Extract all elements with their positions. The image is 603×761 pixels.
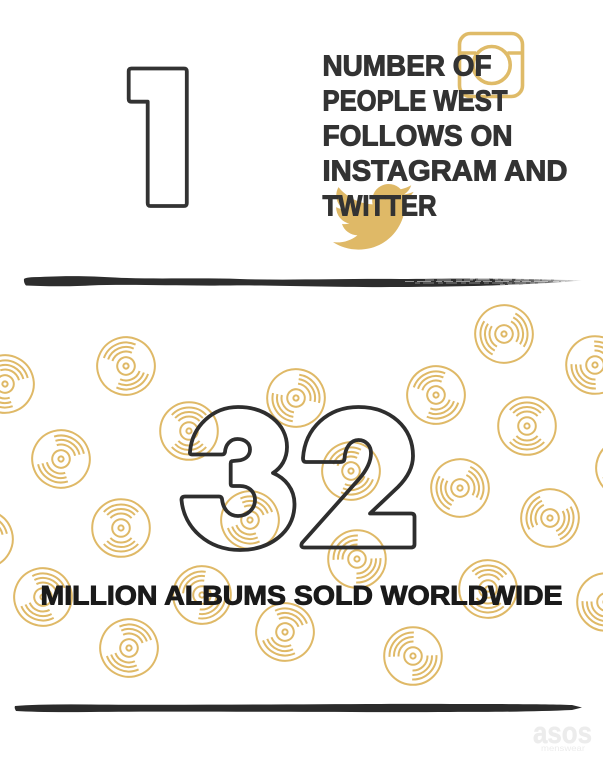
stat text: million albums sold: MILLION ALBUMS SOLD WORLDWIDE <box>40 580 562 610</box>
icon: vinyl record <box>469 299 539 369</box>
icon: twitter bird <box>333 184 414 250</box>
icon: vinyl record <box>91 610 167 686</box>
icon: vinyl record <box>162 555 242 635</box>
icon: vinyl record <box>6 560 80 634</box>
icon: vinyl record <box>565 561 603 643</box>
icon: vinyl record <box>88 328 164 404</box>
icon: vinyl record <box>212 482 288 558</box>
icon: vinyl record <box>514 482 586 554</box>
icon: vinyl record <box>554 324 603 406</box>
icon: vinyl record <box>498 397 556 455</box>
icon: vinyl record <box>0 500 23 578</box>
icon: vinyl record <box>398 357 474 433</box>
digit 3 <box>182 407 294 550</box>
icon: vinyl record <box>372 615 454 697</box>
stat text: number of people West follows: TWITTER <box>322 190 436 222</box>
icon: vinyl record <box>457 558 519 620</box>
digit 2 <box>301 407 414 548</box>
stat text: number of people West follows: INSTAGRAM AND <box>322 156 568 188</box>
icon: vinyl record <box>0 345 44 423</box>
stat text: number of people West follows: FOLLOWS ON <box>322 120 512 152</box>
stat text: number of people West follows: PEOPLE WEST <box>322 86 508 118</box>
icon: vinyl record <box>316 518 398 600</box>
icon: vinyl record <box>424 452 496 524</box>
icon: vinyl record <box>92 499 150 557</box>
divider: bottom brush stroke <box>15 704 582 712</box>
logo: asos menswear: menswear <box>541 743 585 753</box>
icon: vinyl record <box>160 402 218 460</box>
divider: top brush stroke <box>24 276 582 287</box>
icon: vinyl record <box>256 358 336 438</box>
vinyl records pattern <box>0 299 603 697</box>
icon: vinyl record <box>22 420 100 498</box>
icon: vinyl record <box>588 431 603 505</box>
logo: asos menswear: asos <box>533 715 592 750</box>
icon: vinyl record <box>248 595 322 669</box>
big number 1 <box>129 68 187 206</box>
stat text: number of people West follows <box>322 50 568 222</box>
icon: instagram <box>460 34 522 96</box>
big number 32 <box>182 407 414 550</box>
icon: vinyl record <box>314 434 388 508</box>
stat text: number of people West follows: NUMBER OF <box>322 50 492 82</box>
